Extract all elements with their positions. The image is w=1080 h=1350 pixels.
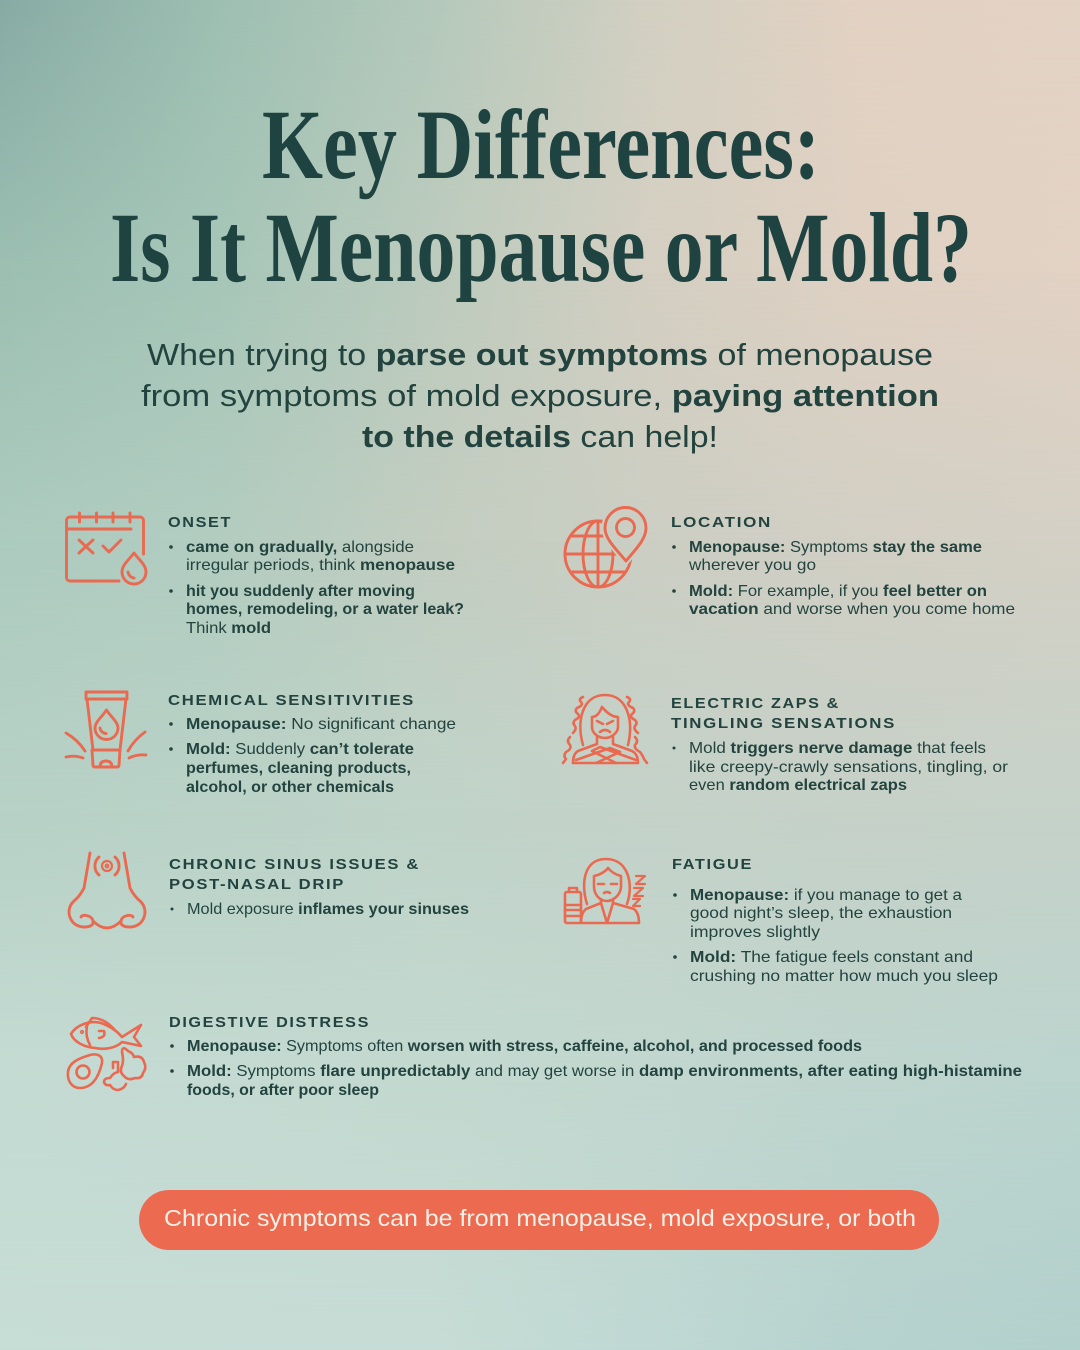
- text: fatigue bullets: improves slightly: [690, 924, 820, 941]
- icon: nose: [69, 853, 145, 928]
- text: location bullets: vacation and worse when you come home: [689, 601, 1015, 618]
- text: fatigue bullets: Menopause: if you manage to get a: [690, 887, 962, 904]
- panel: fatigue: [565, 856, 998, 985]
- text: digestive bullets: Menopause: Symptoms often worsen with stress, caffeine, alcohol, and processed foods: [187, 1038, 862, 1055]
- text: sinus bullet: Mold exposure inflames your sinuses: [187, 901, 469, 918]
- text: digestive bullets: Mold: Symptoms flare unpredictably and may get worse in damp environments, after eating high-histamine: [187, 1063, 1022, 1080]
- text: digestive bullets: foods, or after poor sleep: [187, 1082, 379, 1099]
- icon: globe with map pin: [565, 507, 646, 587]
- callout pill: Chronic symptoms can be from menopause, mold exposure, or both: [164, 1205, 916, 1231]
- text: onset bullets: came on gradually, alongside: [186, 539, 414, 556]
- heading: electric zaps: [671, 695, 896, 732]
- panel: digestive distress: [68, 1014, 1022, 1099]
- icon: tired woman with bottle: [565, 859, 645, 923]
- icon: fish, avocado and broccoli: [68, 1018, 145, 1090]
- text: chemical bullets: perfumes, cleaning products,: [186, 760, 411, 777]
- panel: chronic sinus: [69, 853, 469, 928]
- icon: squeezed tube with drop: [66, 692, 146, 767]
- heading: chemical sensitivities: CHEMICAL SENSITIVITIES: [168, 692, 415, 709]
- callout pill: [139, 1190, 939, 1250]
- icon: calendar with drop: [66, 513, 146, 584]
- text: chemical bullets: Menopause: No significant change: [186, 716, 456, 733]
- intro text: to the details can help!: [362, 419, 718, 454]
- heading: electric zaps: TINGLING SENSATIONS: [671, 715, 896, 732]
- icon: woman with crossed arms and zaps: [563, 695, 647, 763]
- text: onset bullets: Think mold: [186, 620, 271, 637]
- heading: onset: ONSET: [168, 514, 232, 531]
- panel: chemical sensitivities: [66, 692, 456, 796]
- heading: digestive distress: DIGESTIVE DISTRESS: [169, 1014, 370, 1031]
- intro text: from symptoms of mold exposure, paying attention: [141, 378, 939, 413]
- text: electric zaps bullet: [672, 740, 1009, 794]
- text: fatigue bullets: good night’s sleep, the exhaustion: [690, 905, 952, 922]
- panel: onset: [66, 513, 464, 637]
- text: digestive bullets: [170, 1038, 1022, 1099]
- text: fatigue bullets: Mold: The fatigue feels constant and: [690, 949, 973, 966]
- title: Key Differences:: [262, 89, 820, 200]
- title: [110, 89, 972, 303]
- heading: location: LOCATION: [671, 514, 772, 531]
- intro text: When trying to parse out symptoms of menopause: [147, 337, 933, 372]
- text: location bullets: [672, 539, 1015, 618]
- heading: chronic sinus: POST-NASAL DRIP: [169, 876, 345, 893]
- text: electric zaps bullet: like creepy-crawly sensations, tingling, or: [689, 759, 1009, 776]
- text: onset bullets: hit you suddenly after moving: [186, 583, 415, 600]
- text: fatigue bullets: crushing no matter how much you sleep: [690, 968, 998, 985]
- text: location bullets: Mold: For example, if you feel better on: [689, 583, 987, 600]
- heading: chronic sinus: CHRONIC SINUS ISSUES &: [169, 856, 420, 873]
- text: onset bullets: irregular periods, think menopause: [186, 557, 455, 574]
- text: chemical bullets: [169, 716, 456, 796]
- text: electric zaps bullet: even random electrical zaps: [689, 777, 907, 794]
- text: fatigue bullets: [673, 887, 998, 985]
- text: location bullets: wherever you go: [688, 557, 816, 574]
- heading: electric zaps: ELECTRIC ZAPS &: [671, 695, 840, 712]
- text: chemical bullets: alcohol, or other chemicals: [186, 779, 394, 796]
- intro text: [141, 337, 939, 454]
- text: location bullets: Menopause: Symptoms stay the same: [689, 539, 982, 556]
- heading: fatigue: FATIGUE: [672, 856, 753, 873]
- panel: location: [565, 507, 1015, 618]
- text: chemical bullets: Mold: Suddenly can’t tolerate: [186, 741, 414, 758]
- text: onset bullets: [169, 539, 464, 637]
- text: electric zaps bullet: Mold triggers nerve damage that feels: [689, 740, 986, 757]
- panel: electric zaps: [563, 695, 1009, 794]
- text: onset bullets: homes, remodeling, or a water leak?: [186, 601, 464, 618]
- heading: chronic sinus: [169, 856, 420, 893]
